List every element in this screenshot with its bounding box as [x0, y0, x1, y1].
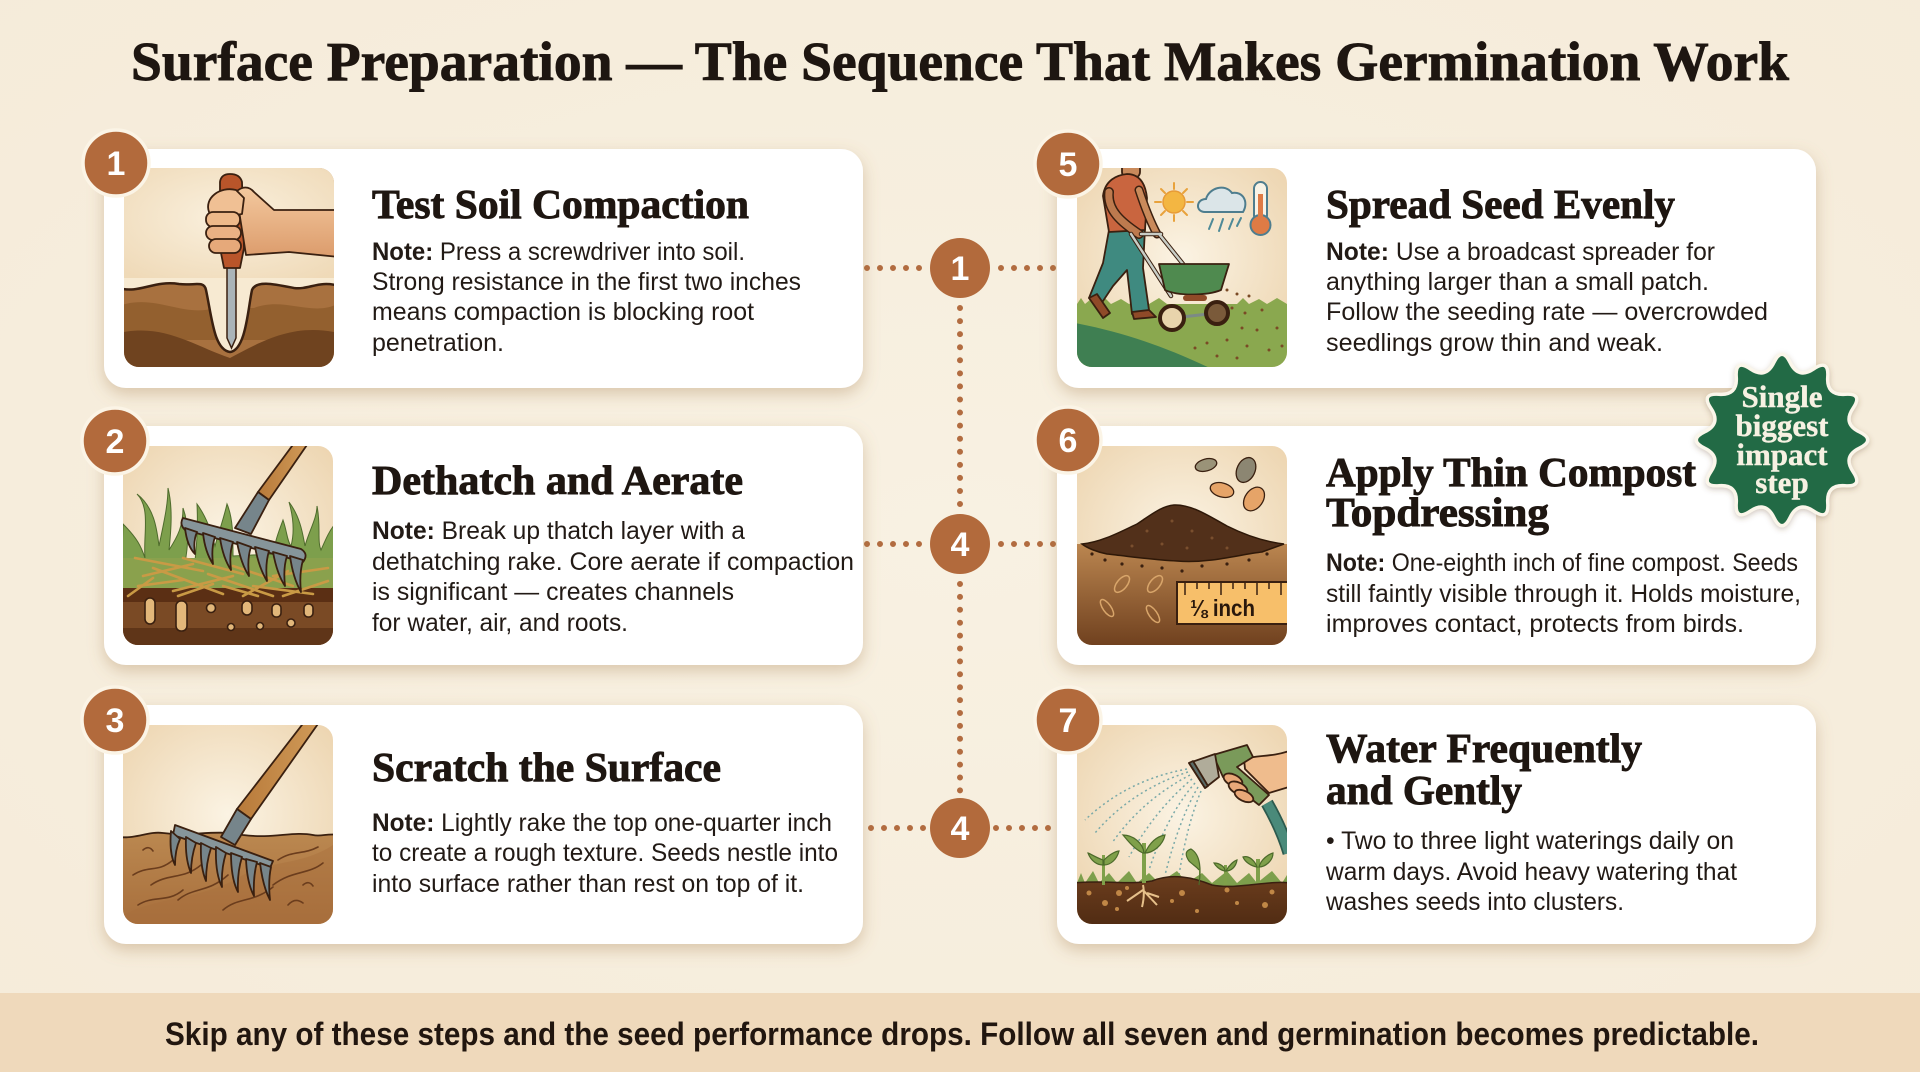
note text [372, 809, 838, 898]
note text [1325, 827, 1737, 916]
ruler: ⅛ inch [1190, 595, 1255, 621]
note text [1326, 549, 1801, 638]
connector node 4 upper: 4 [951, 526, 970, 564]
note text [372, 238, 801, 357]
icon: rake in thatch and aerated soil [121, 442, 335, 645]
note text: warm days. Avoid heavy watering that [1325, 858, 1737, 886]
note text: penetration. [372, 329, 504, 357]
badge: step number 5: 5 [1059, 146, 1077, 184]
badge: step number 7: 7 [1059, 702, 1077, 740]
heading: Test Soil Compaction [372, 181, 749, 227]
note text: Note: Use a broadcast spreader for [1326, 238, 1715, 266]
note text: Note: Press a screwdriver into soil. [372, 238, 745, 266]
icon: rake scratching soil [118, 721, 338, 930]
connector node 1 [930, 238, 990, 298]
badge: step number 2 [82, 408, 148, 474]
center timeline connector [867, 238, 1056, 858]
note text: to create a rough texture. Seeds nestle into [372, 839, 838, 867]
note text: washes seeds into clusters. [1325, 888, 1624, 916]
heading [1326, 725, 1642, 813]
thermometer [1250, 182, 1270, 235]
note text: Follow the seeding rate — overcrowded [1326, 298, 1768, 326]
badge: step number 1: 1 [107, 145, 125, 183]
icon: hand pressing screwdriver into soil [119, 163, 339, 373]
note text: seedlings grow thin and weak. [1326, 329, 1663, 357]
ruler [1177, 582, 1289, 624]
note text: for water, air, and roots. [372, 609, 628, 637]
seal callout: single biggest impact step: step [1755, 465, 1809, 500]
note text: dethatching rake. Core aerate if compaction [372, 548, 854, 576]
connector node 4 upper [930, 514, 990, 574]
badge: step number 3 [82, 687, 148, 753]
badge: step number 2: 2 [106, 423, 124, 461]
panel: step 7 water frequently and gently [1035, 687, 1816, 944]
title: Surface Preparation — The Sequence That Makes Germination Work [131, 31, 1789, 92]
connector node 4 lower: 4 [951, 810, 970, 848]
badge: step number 6 [1035, 407, 1101, 473]
connector node 1: 1 [951, 250, 969, 288]
seal callout: single biggest impact step: impact [1736, 437, 1828, 472]
connector node 4 lower [930, 798, 990, 858]
icon: compost pile with seeds and ruler [1077, 446, 1289, 645]
seal callout: single biggest impact step: Single [1742, 379, 1822, 414]
heading: Dethatch and Aerate [372, 457, 743, 503]
seal callout: single biggest impact step: biggest [1736, 408, 1829, 443]
panel: step 1 test soil compaction [83, 130, 863, 388]
bottom banner [0, 993, 1920, 1072]
heading: Spread Seed Evenly [1326, 181, 1675, 227]
heading: and Gently [1326, 767, 1522, 813]
heading: Water Frequently [1326, 725, 1642, 771]
note text: is significant — creates channels [372, 578, 734, 606]
icon: person pushing seed spreader with weather icons [1075, 160, 1287, 369]
note text: Note: Lightly rake the top one-quarter inch [372, 809, 832, 837]
badge: step number 5 [1035, 131, 1101, 197]
note text [372, 517, 854, 637]
note text: • Two to three light waterings daily on [1326, 827, 1734, 855]
sun [1155, 183, 1193, 221]
note text: improves contact, protects from birds. [1326, 610, 1744, 638]
note text: Strong resistance in the first two inches [372, 268, 801, 296]
note text: Note: Break up thatch layer with a [372, 517, 745, 545]
panel: step 3 scratch the surface [82, 687, 863, 944]
panel: step 2 dethatch and aerate [82, 408, 863, 665]
cloud [1198, 188, 1245, 231]
seal callout: single biggest impact step [1696, 354, 1868, 526]
panel: step 6 apply thin compost topdressing [1035, 407, 1816, 665]
badge: step number 1 [83, 130, 149, 196]
badge: step number 7 [1035, 687, 1101, 753]
note text: anything larger than a small patch. [1326, 268, 1709, 296]
heading: Scratch the Surface [372, 744, 721, 790]
badge: step number 6: 6 [1059, 422, 1077, 460]
note text: still faintly visible through it. Holds moisture, [1326, 580, 1801, 608]
panel: step 5 spread seed evenly [1035, 131, 1816, 388]
heading: Apply Thin Compost [1326, 449, 1696, 495]
note text: means compaction is blocking root [372, 298, 754, 326]
note text: into surface rather than rest on top of it. [372, 870, 804, 898]
icon: hose nozzle watering seedlings [1072, 725, 1292, 930]
note text [1326, 238, 1768, 357]
badge: step number 3: 3 [106, 702, 124, 740]
bottom banner: Skip any of these steps and the seed performance drops. Follow all seven and germination becomes predictable. [165, 1016, 1759, 1052]
note text: Note: One-eighth inch of fine compost. Seeds [1326, 549, 1798, 577]
heading: Topdressing [1326, 489, 1550, 535]
heading [1326, 449, 1696, 535]
